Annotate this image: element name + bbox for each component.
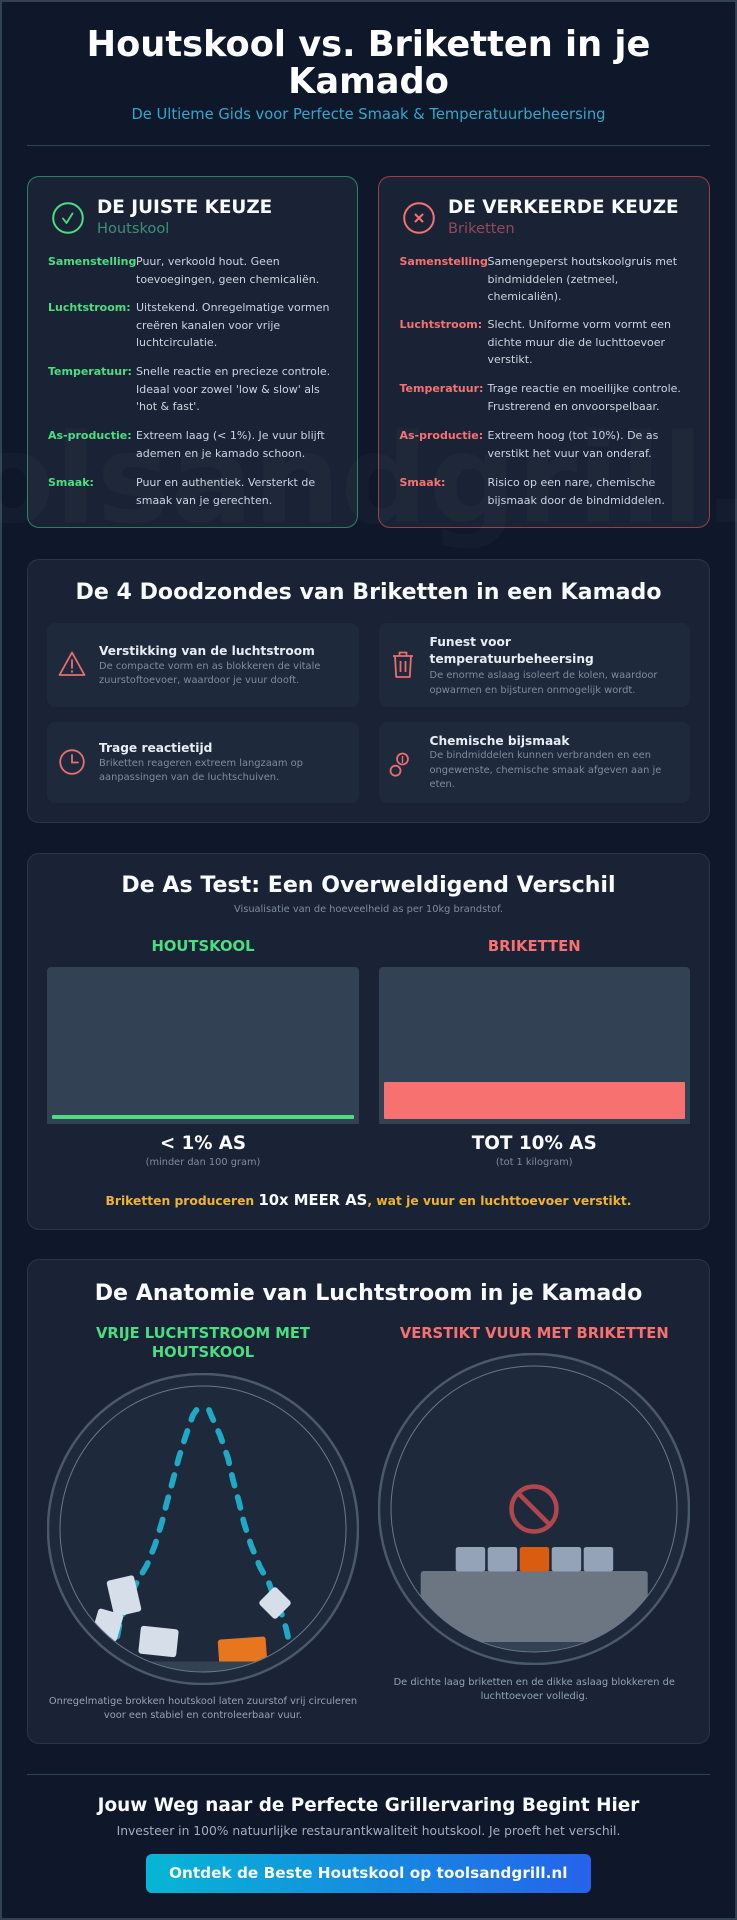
row: samenstelling: Samenstelling: [400, 255, 488, 268]
card description: Briketten reageren extreem langzaam op: [99, 758, 303, 769]
card description: [99, 661, 320, 686]
icon: blocked airflow: [512, 1486, 556, 1532]
value: under 1 percent: < 1% AS: [160, 1133, 246, 1154]
airflow path left: [117, 1410, 196, 1638]
caption: houtskool: Onregelmatige brokken houtskool laten zuurstof vrij circuleren: [49, 1696, 357, 1706]
panel: de verkeerde keuze: bindmiddelen (zetmeel,: [488, 273, 618, 286]
footer text: Investeer in 100% natuurlijke restaurantkwaliteit houtskool. Je proeft het verschil.: [117, 1824, 620, 1838]
call to action button: [146, 1854, 590, 1893]
diagram: kamado briketten: [378, 1353, 690, 1665]
subtitle: De Ultieme Gids voor Perfecte Smaak & Temperatuurbeheersing: [131, 106, 606, 123]
icon: trash bin: [393, 652, 413, 678]
callout: Briketten produceren 10x MEER AS, wat je vuur en luchttoevoer verstikt.: [106, 1192, 631, 1209]
caption: briketten: [394, 1676, 675, 1702]
card description: De bindmiddelen kunnen verbranden en een: [430, 750, 651, 761]
panel: de verkeerde keuze: bijsmaak door de bindmiddelen.: [488, 494, 665, 507]
row: as-productie: Extreem hoog (tot 10%). De as: [488, 429, 658, 442]
subheading: Visualisatie van de hoeveelheid as per 10kg brandstof.: [234, 904, 503, 915]
row: as-productie: As-productie:: [400, 429, 483, 442]
heading: de verkeerde keuze: DE VERKEERDE KEUZE: [448, 197, 679, 218]
label: vrije luchtstroom: HOUTSKOOL: [152, 1344, 254, 1361]
panel: 4 doodzondes: [27, 559, 710, 823]
panel: de verkeerde keuze: dichte muur die de luchttoevoer: [488, 336, 665, 349]
card description: [99, 758, 303, 783]
diagram: kamado houtskool: [47, 1373, 359, 1685]
row: as-productie: Extreem laag (< 1%). Je vuur blijft: [136, 429, 325, 442]
row: temperatuur: [48, 365, 330, 413]
card description: opwarmen en bijsturen onmogelijk wordt.: [430, 685, 635, 696]
subheading: houtskool: Houtskool: [97, 220, 169, 237]
card description: [430, 750, 661, 790]
row: samenstelling: [400, 255, 677, 303]
card title: Trage reactietijd: [99, 741, 212, 755]
value: tot 10 percent: TOT 10% AS: [472, 1133, 597, 1154]
panel: de juiste keuze: ademen en je kamado schoon.: [136, 447, 305, 460]
panel: de as test: [27, 853, 710, 1230]
icon: check circle: [52, 202, 84, 234]
card title: Chemische bijsmaak: [430, 734, 570, 748]
row: temperatuur: [400, 382, 681, 413]
caption: houtskool: [49, 1696, 357, 1721]
row: luchtstroom: Uitstekend. Onregelmatige vormen: [136, 301, 330, 314]
icon: chemical circles: [390, 752, 409, 777]
card: verstikking: [47, 623, 359, 707]
card description: zuurstoftoevoer, waardoor je vuur dooft.: [99, 675, 299, 686]
row: smaak: Smaak:: [48, 476, 94, 489]
subheading: briketten: Briketten: [448, 220, 515, 237]
row: smaak: Risico op een nare, chemische: [488, 476, 655, 489]
ash layer: [151, 1662, 256, 1672]
row: temperatuur: Temperatuur:: [48, 365, 132, 378]
row: temperatuur: Trage reactie en moeilijke controle.: [488, 382, 681, 395]
row: luchtstroom: Luchtstroom:: [400, 318, 482, 331]
row: as-productie: [48, 429, 325, 460]
note: tot 1 kilogram: (tot 1 kilogram): [496, 1157, 573, 1168]
icon: warning triangle: [58, 652, 86, 676]
card description: aanpassingen van de luchtschuiven.: [99, 772, 279, 783]
row: smaak: [48, 476, 315, 507]
row: luchtstroom: [48, 301, 330, 349]
caption: briketten: luchttoevoer volledig.: [481, 1691, 588, 1702]
ash layer base: [484, 1642, 584, 1652]
label: briketten: BRIKETTEN: [488, 938, 581, 955]
row: as-productie: [400, 429, 658, 460]
label: houtskool: HOUTSKOOL: [151, 938, 255, 955]
row: temperatuur: Temperatuur:: [400, 382, 483, 395]
bar chart: briketten ash: [378, 967, 690, 1124]
row: samenstelling: [48, 255, 319, 286]
label: verstikt vuur: VERSTIKT VUUR MET BRIKETTEN: [400, 1324, 669, 1342]
card description: [430, 670, 658, 696]
panel: de verkeerde keuze: verstikt het vuur van onderaf.: [488, 447, 652, 460]
heading: de juiste keuze: DE JUISTE KEUZE: [97, 197, 272, 218]
heading: De Anatomie van Luchtstroom in je Kamado: [95, 1280, 642, 1306]
panel: de juiste keuze: creëren kanalen voor vrije: [136, 319, 280, 332]
row: temperatuur: Snelle reactie en precieze controle.: [136, 365, 330, 378]
row: luchtstroom: Luchtstroom:: [48, 301, 131, 314]
panel: de juiste keuze: 'hot & fast'.: [136, 400, 200, 413]
card description: De enorme aslaag isoleert de kolen, waardoor: [430, 670, 657, 681]
label: vrije luchtstroom: VRIJE LUCHTSTROOM MET: [96, 1324, 310, 1342]
row: samenstelling: Samengeperst houtskoolgruis met: [488, 255, 677, 268]
panel: de verkeerde keuze: chemicaliën).: [488, 290, 562, 303]
icon: cross circle: [403, 202, 435, 234]
card: chemische bijsmaak: [378, 722, 690, 803]
panel: de juiste keuze: smaak van je gerechten.: [136, 494, 272, 507]
card title: temperatuurbeheersing: [430, 652, 594, 666]
footer heading: Jouw Weg naar de Perfecte Grillervaring Begint Hier: [98, 1795, 639, 1816]
row: samenstelling: Samenstelling: [48, 255, 136, 268]
title: [87, 24, 650, 102]
bar: up to 10 percent: [384, 1082, 685, 1119]
panel: anatomie van luchtstroom: [27, 1259, 710, 1744]
airflow path right: [209, 1410, 288, 1637]
row: smaak: [400, 476, 665, 507]
row: luchtstroom: [400, 318, 671, 366]
note: minder dan 100 gram: (minder dan 100 gram): [146, 1157, 260, 1168]
panel: de juiste keuze: toevoegingen, geen chemicaliën.: [136, 273, 319, 286]
bar chart: houtskool ash: [47, 967, 359, 1124]
panel: de juiste keuze: Ideaal voor zowel 'low & slow' als: [136, 383, 320, 396]
panel: de verkeerde keuze: [378, 176, 710, 528]
briquettes: [456, 1547, 613, 1572]
thick ash layer: [421, 1571, 648, 1642]
panel: de verkeerde keuze: Frustrerend en onvoorspelbaar.: [488, 400, 660, 413]
card title: [430, 634, 594, 666]
card title: Verstikking van de luchtstroom: [99, 644, 315, 658]
row: as-productie: As-productie:: [48, 429, 132, 442]
label: vrije luchtstroom: [96, 1324, 310, 1361]
heading: De 4 Doodzondes van Briketten in een Kamado: [76, 579, 662, 605]
panel: de verkeerde keuze: verstikt.: [488, 353, 533, 366]
card description: De compacte vorm en as blokkeren de vitale: [99, 661, 320, 672]
caption: briketten: De dichte laag briketten en de dikke aslaag blokkeren de: [394, 1676, 675, 1688]
heading: De As Test: Een Overweldigend Verschil: [121, 872, 616, 898]
row: smaak: Smaak:: [400, 476, 445, 489]
charcoal lumps: [91, 1575, 292, 1657]
bar: under 1 percent: [52, 1115, 354, 1119]
row: samenstelling: Puur, verkoold hout. Geen: [136, 255, 280, 268]
caption: houtskool: voor een stabiel en controleerbaar vuur.: [104, 1710, 302, 1721]
glowing ember: [218, 1636, 267, 1662]
call to action button: Ontdek de Beste Houtskool op toolsandgrill.nl: [169, 1864, 568, 1882]
card description: ongewenste, chemische smaak afgeven aan je: [430, 765, 661, 776]
title: Kamado: [288, 61, 449, 102]
row: smaak: Puur en authentiek. Versterkt de: [136, 476, 315, 489]
title: Houtskool vs. Briketten in je: [87, 24, 650, 65]
icon: clock: [59, 749, 85, 775]
panel: de juiste keuze: luchtcirculatie.: [136, 336, 217, 349]
card: funest: [378, 623, 690, 707]
card description: eten.: [430, 779, 455, 790]
panel: de juiste keuze: [27, 176, 358, 528]
row: luchtstroom: Slecht. Uniforme vorm vormt een: [488, 318, 671, 331]
card: trage reactietijd: [47, 722, 359, 803]
card title: Funest voor: [430, 634, 511, 648]
